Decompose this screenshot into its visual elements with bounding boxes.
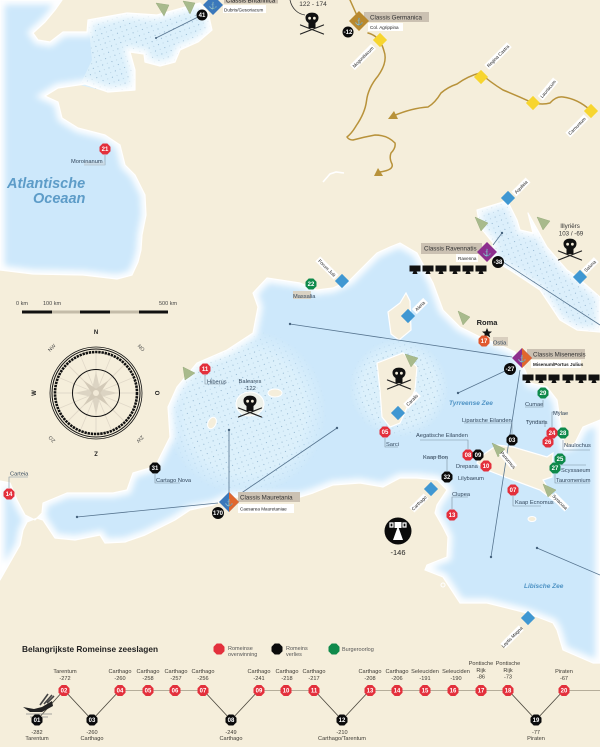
battle markers on map: 13 [449, 513, 456, 519]
timeline markers: 16 [450, 688, 457, 694]
timeline labels: Rijk [503, 668, 513, 674]
ships: Misenum fleet [522, 374, 600, 383]
rotated port labels: Panormus [499, 451, 517, 470]
stippled patrol zone: Balearic [174, 336, 322, 490]
battle markers on map: 29 [540, 391, 547, 397]
fleet: Classis Misenensis [512, 348, 586, 368]
battle markers on map: 10 [483, 464, 490, 470]
timeline labels: Carthago/Tarentum [318, 736, 366, 742]
rotated port labels: Mogontiacum [352, 46, 375, 69]
sea name: Tyrreense Zee: Tyrreense Zee [449, 400, 493, 407]
timeline labels: -208 [364, 676, 376, 682]
battle place labels with leaders: Moroinanum [71, 159, 103, 165]
fleet: Classis Germanica: Col. Agrippina [370, 25, 399, 30]
battle markers on map: 26 [545, 440, 552, 446]
timeline markers: 01 [34, 718, 41, 724]
battle place labels with leaders: Cumae [525, 402, 543, 408]
timeline labels: Piraten [527, 736, 545, 742]
timeline labels: Tarentum [53, 669, 77, 675]
fleet: Classis Germanica [349, 11, 429, 31]
timeline labels: Pontische [469, 661, 493, 667]
timeline labels: -67 [560, 676, 568, 682]
battle place labels with leaders: Carteia [10, 472, 29, 478]
timeline labels: Carthago [164, 669, 188, 675]
arrow: Rhine end [374, 168, 383, 176]
numbers on circles: -12 [344, 30, 353, 36]
rotated port labels: Carnuntum [567, 116, 587, 136]
timeline labels: -190 [450, 676, 462, 682]
stippled patrol zone: Adriatic [477, 200, 600, 332]
icon: Carthage destroyed, -146: -146 [390, 548, 406, 557]
icon: pirate skull, Illyria [558, 239, 582, 260]
timeline labels: -218 [281, 676, 293, 682]
arrow heads [76, 37, 538, 558]
pirate label: top: 122 - 174 [299, 1, 327, 8]
pirate label: Illyriers [559, 223, 584, 238]
compass rose: ZO [48, 434, 57, 443]
battle markers on map: 28 [560, 431, 567, 437]
fleet arrows [77, 15, 600, 575]
timeline markers: 17 [478, 688, 485, 694]
scale bar: 100 km [43, 301, 61, 307]
legend: Romeinse [228, 646, 253, 652]
rotated port labels: Forum Julii [317, 258, 337, 278]
island: Menorca [268, 389, 282, 397]
battle place labels with leaders: Liparische Eilanden [462, 418, 512, 424]
scale bar: 0 km [16, 301, 28, 307]
timeline labels: -217 [308, 676, 320, 682]
lake [323, 172, 344, 182]
icon: Carthage destroyed, -146 [384, 518, 412, 557]
island: Malta [528, 516, 536, 522]
pirate label: Illyriers: 103 / -69 [559, 230, 584, 238]
timeline labels: Carthago [108, 669, 132, 675]
fleet: Classis Ravennatis: Ravenna [458, 256, 477, 261]
island: Sicily [477, 445, 557, 503]
timeline labels: -257 [170, 676, 182, 682]
timeline markers: 02 [61, 688, 68, 694]
battle markers on map: 08 [465, 453, 472, 459]
battle markers on map: 11 [202, 367, 209, 373]
icon: pirate skull, Sardinia [388, 368, 410, 389]
numbers on circles: 41 [199, 13, 206, 19]
rotated port labels: Syracusa [551, 494, 569, 511]
compass rose: NO [136, 344, 146, 353]
fleet: Classis Britannica: Dubris/Gesoriacum [224, 8, 263, 12]
fleet: Classis Britannica [203, 0, 278, 15]
rotated port labels: Regina Castra [486, 44, 511, 68]
timeline labels [25, 661, 573, 742]
rotated port labels [315, 42, 599, 649]
scale bar [16, 301, 177, 314]
river: Rhine route [347, 0, 395, 172]
timeline labels: Carthago [247, 669, 271, 675]
timeline labels: -260 [86, 730, 98, 736]
numbers on circles: -27 [506, 367, 515, 373]
island: Corsica [388, 293, 411, 340]
rotated port labels: Salona [583, 259, 597, 273]
numbers on circles: 170 [213, 511, 224, 517]
fleet: Classis Mauretania: Caesarea Mauretaniae [240, 506, 287, 512]
pirate label: Baleares: Baleares [239, 379, 262, 385]
battle markers on map: 14 [6, 492, 13, 498]
timeline markers: 11 [311, 688, 318, 694]
rotated port labels: Aleria [414, 300, 426, 312]
timeline markers: 20 [561, 688, 568, 694]
yellow fort icons [373, 33, 598, 118]
battle markers on map: 22 [308, 282, 315, 288]
stippled patrol zone: Channel [80, 3, 212, 92]
sea name: Atlantische Oceaan [6, 176, 86, 207]
compass rose: Z [94, 450, 98, 456]
timeline markers: 15 [422, 688, 429, 694]
battle place labels with leaders: Tyndaris [526, 420, 548, 426]
battle markers on map: 27 [552, 466, 559, 472]
timeline labels: Carthago [80, 736, 104, 742]
battle place labels with leaders: Cartago Nova [156, 478, 192, 484]
pirate label: Baleares: -122 [244, 386, 256, 392]
timeline labels: -191 [419, 676, 431, 682]
battle place labels with leaders: Ostia [493, 340, 507, 346]
island: Ibiza [206, 416, 218, 430]
black circles with numbers [196, 10, 516, 519]
sea name: Atlantische Oceaan: Atlantische [6, 176, 85, 192]
battle place labels with leaders: Clupea [452, 492, 471, 498]
compass rose: O [153, 391, 159, 396]
timeline labels: Seleuciden [442, 669, 470, 675]
battle place labels with leaders: Hiberus [207, 380, 227, 386]
fleet: Classis Misenensis: Misenum/Portus Julius [533, 362, 584, 367]
island: Sardinia [377, 353, 417, 427]
timeline markers: 06 [172, 688, 179, 694]
sea name: Atlantische Oceaan: Oceaan [33, 191, 86, 207]
timeline markers: 07 [200, 688, 207, 694]
timeline labels: -86 [477, 674, 485, 680]
battle markers on map: 25 [557, 457, 564, 463]
sail icons [156, 1, 556, 497]
sea name: Libische Zee: Libische Zee [524, 583, 564, 590]
timeline markers: 09 [256, 688, 263, 694]
battle place labels with leaders: Lilybaeum [458, 476, 484, 482]
legend: verlies [286, 652, 302, 658]
timeline labels: -249 [225, 730, 237, 736]
fleet: Classis Ravennatis [421, 242, 497, 262]
timeline labels: Piraten [555, 669, 573, 675]
scale bar: 500 km [159, 301, 177, 307]
timeline labels: Carthago [302, 669, 326, 675]
numbers on circles [199, 13, 515, 517]
compass rose: NW [47, 343, 58, 353]
timeline labels: Rijk [476, 668, 486, 674]
fleet: Classis Ravennatis: Classis Ravennatis [424, 246, 477, 252]
timeline labels: Carthago [275, 669, 299, 675]
fleet: Classis Germanica: Classis Germanica [370, 14, 422, 22]
sea: Mediterranean [0, 243, 600, 663]
blue port icons [335, 191, 587, 625]
timeline labels: -77 [532, 730, 540, 736]
rotated port labels: Lauriacum [539, 79, 557, 99]
icon: pirate skull, top [300, 13, 324, 34]
battle place labels with leaders: Drepana [456, 464, 479, 470]
timeline labels: -260 [114, 676, 126, 682]
legend: Burgeroorlog [342, 647, 374, 653]
battle place labels with leaders: Sarci [386, 442, 399, 448]
timeline markers: 03 [89, 718, 96, 724]
fleet: Classis Ravennatis: ⚓ [483, 248, 492, 257]
timeline markers: 08 [228, 718, 235, 724]
battle place labels with leaders: Tauromenium [556, 478, 591, 484]
battle markers on map: 05 [382, 430, 389, 436]
legend: overwinning [228, 652, 257, 658]
river: Danube route [393, 73, 590, 116]
battle place labels with leaders [9, 155, 591, 509]
battle markers on map: 31 [152, 466, 159, 472]
timeline labels: Carthago [219, 736, 243, 742]
battle markers on map: 21 [102, 147, 109, 153]
compass rose [32, 330, 159, 456]
fleet: Classis Misenensis: ⚓ [518, 354, 527, 363]
timeline markers: 12 [339, 718, 346, 724]
numbers on circles: -38 [494, 260, 503, 266]
battle markers on map: 07 [510, 488, 517, 494]
fleet: Classis Mauretania [219, 492, 300, 513]
timeline labels: Pontische [496, 661, 520, 667]
battle markers on map: 24 [549, 431, 556, 437]
rotated port labels: Leptis Magna [501, 625, 524, 649]
battle place labels with leaders: Massalia [293, 294, 316, 300]
city: Roma: Roma [477, 318, 498, 327]
timeline labels: Carthago [385, 669, 409, 675]
timeline labels: Carthago [191, 669, 215, 675]
battle place labels with leaders: Mylae [553, 411, 568, 417]
timeline labels: Carthago [358, 669, 382, 675]
battle markers on map: 09 [475, 453, 482, 459]
arc near top skull [290, 0, 305, 15]
lake south [441, 583, 445, 587]
battle place labels with leaders: Naulochus [564, 443, 591, 449]
fleet: Classis Mauretania: ⚓ [225, 498, 234, 507]
timeline connecting lines [37, 690, 600, 720]
battle markers on map: 03 [509, 438, 516, 444]
timeline labels: -256 [197, 676, 209, 682]
icon: sinking ship [23, 694, 54, 717]
timeline labels: -210 [336, 730, 348, 736]
sea: Adriatic [477, 200, 600, 332]
timeline heading: Belangrijkste Romeinse zeeslagen [22, 644, 158, 654]
timeline markers: 10 [283, 688, 290, 694]
battle place labels with leaders: Kaap Ecnomus [515, 500, 554, 506]
timeline labels: -241 [253, 676, 265, 682]
timeline markers: 13 [367, 688, 374, 694]
rotated port labels: Aquileia [514, 179, 529, 195]
timeline labels: -272 [59, 676, 71, 682]
battle place labels with leaders: Aegatische Eilanden [416, 433, 468, 439]
battle markers on map: 32 [444, 475, 451, 481]
fleet: Classis Britannica: ⚓ [209, 1, 218, 10]
sea: Atlantic Ocean and English Channel [0, 0, 212, 279]
island: Mallorca [236, 392, 264, 416]
compass rose: N [94, 330, 98, 336]
timeline labels: Tarentum [25, 736, 49, 742]
timeline markers: 05 [145, 688, 152, 694]
icon: pirate skull, Baleares [238, 396, 262, 417]
city: Roma [477, 318, 498, 337]
pirate label: Illyriers: Illyriërs [560, 223, 580, 230]
timeline markers: 04 [117, 688, 124, 694]
timeline labels: -258 [142, 676, 154, 682]
battle markers on map: 17 [481, 339, 488, 345]
timeline labels: -282 [31, 730, 43, 736]
pirate label: Baleares [239, 379, 262, 392]
fleet: Classis Germanica: ⚓ [355, 17, 364, 26]
timeline markers: 18 [505, 688, 512, 694]
fleet: Classis Mauretania: Classis Mauretania [240, 494, 293, 502]
stippled patrol zone: Sardinia [352, 342, 447, 436]
timeline labels: -206 [391, 676, 403, 682]
battle place labels with leaders: Scyssaeum [561, 468, 591, 474]
rotated port labels: Carthago [411, 494, 428, 512]
timeline markers [32, 685, 570, 726]
timeline markers: 14 [394, 688, 401, 694]
fleet: Classis Misenensis: Classis Misenensis [533, 352, 586, 358]
timeline labels: Seleuciden [411, 669, 439, 675]
rotated port labels: Caralis [405, 393, 419, 407]
legend: Romeins [286, 646, 308, 652]
compass rose: ZW [135, 434, 145, 444]
legend [214, 644, 374, 658]
timeline markers: 19 [533, 718, 540, 724]
arrow: Danube end [388, 111, 398, 119]
timeline labels: Carthago [136, 669, 160, 675]
battle markers on map [4, 144, 568, 520]
ships: Ravenna fleet [410, 266, 486, 274]
battle place labels with leaders: Kaap Bon [423, 455, 448, 461]
timeline labels: -73 [504, 674, 512, 680]
compass rose: W [32, 390, 38, 396]
